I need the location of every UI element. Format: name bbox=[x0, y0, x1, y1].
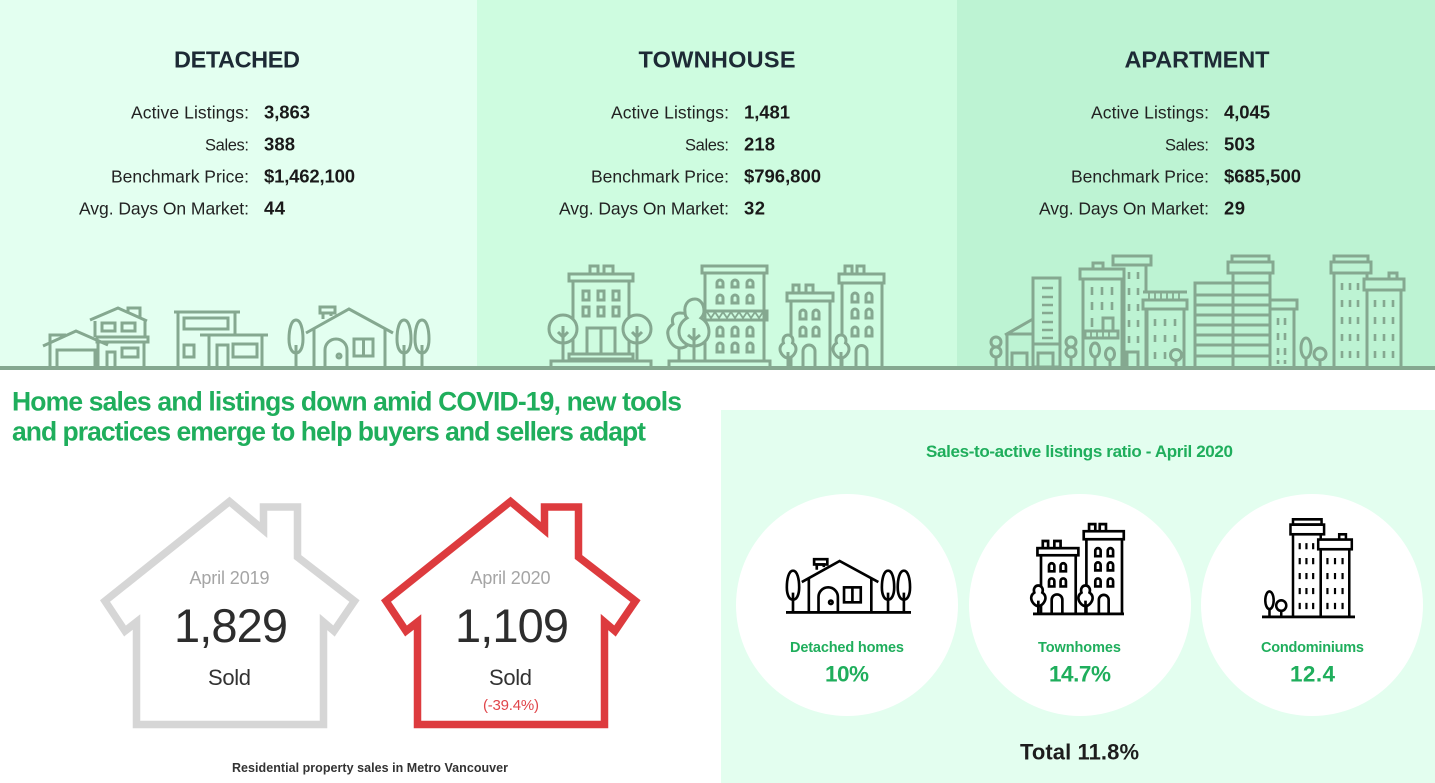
sold count: 1,109 bbox=[455, 599, 569, 652]
stats labels: detached bbox=[79, 102, 249, 218]
circle: detached homes bbox=[736, 494, 958, 716]
date label: April 2020 bbox=[470, 568, 550, 588]
sold count: 1,829 bbox=[174, 599, 288, 652]
icon: detached home bbox=[786, 559, 911, 614]
stats labels: apartment: Active Listings: bbox=[1091, 102, 1209, 122]
stats labels: apartment bbox=[1039, 102, 1209, 218]
icon: apartment skyline bbox=[991, 256, 1404, 367]
house outline: red bbox=[386, 502, 636, 724]
heading: apartment: APARTMENT bbox=[1124, 46, 1270, 72]
panel: apartment background bbox=[957, 0, 1435, 368]
stats labels: detached: Avg. Days On Market: bbox=[79, 198, 249, 218]
panel heading: Sales-to-active listings ratio - April 2020 bbox=[926, 442, 1233, 461]
label: Condominiums bbox=[1261, 640, 1364, 656]
sold label: Sold bbox=[489, 665, 532, 690]
stats labels: townhouse: Avg. Days On Market: bbox=[559, 198, 729, 218]
value: 10% bbox=[825, 662, 869, 686]
stats labels: townhouse: Benchmark Price: bbox=[591, 166, 729, 186]
stats values: detached: 44 bbox=[264, 198, 286, 218]
stats values: townhouse bbox=[744, 102, 821, 218]
house outline: grey bbox=[105, 502, 354, 724]
stats labels: apartment: Sales: bbox=[1165, 136, 1209, 154]
icon: condominiums bbox=[1262, 519, 1355, 618]
panel: April 2019 house bbox=[105, 502, 354, 724]
panel: apartment stats bbox=[1039, 46, 1301, 218]
stats labels: detached: Benchmark Price: bbox=[111, 166, 249, 186]
sold label: Sold bbox=[208, 665, 251, 690]
icon: townhomes bbox=[1031, 524, 1124, 615]
panel: detached background bbox=[0, 0, 477, 368]
date label: April 2019 bbox=[190, 568, 270, 588]
stats values: detached: 3,863 bbox=[264, 102, 310, 122]
stats labels: townhouse bbox=[559, 102, 729, 218]
stats labels: apartment: Benchmark Price: bbox=[1071, 166, 1209, 186]
stats values: townhouse: 32 bbox=[744, 198, 765, 218]
stats values: detached bbox=[264, 102, 355, 218]
stats values: apartment bbox=[1224, 102, 1301, 218]
ground line bbox=[0, 366, 1435, 370]
circle: townhomes bbox=[969, 494, 1191, 716]
stats values: townhouse: $796,800 bbox=[744, 166, 821, 186]
panel: sales-to-active listings ratio bbox=[721, 410, 1435, 783]
icon: townhouse skyline bbox=[549, 266, 884, 367]
stats values: apartment: 4,045 bbox=[1224, 102, 1270, 122]
stats values: townhouse: 218 bbox=[744, 134, 775, 154]
stats values: detached: $1,462,100 bbox=[264, 166, 355, 186]
icon: detached skyline bbox=[43, 307, 429, 367]
heading: townhouse: TOWNHOUSE bbox=[638, 46, 796, 72]
stats labels: townhouse: Sales: bbox=[685, 136, 729, 154]
percent change: (-39.4%) bbox=[483, 697, 539, 714]
stats values: apartment: 29 bbox=[1224, 198, 1245, 218]
stats values: detached: 388 bbox=[264, 134, 295, 154]
value: 12.4 bbox=[1290, 662, 1335, 686]
headline bbox=[12, 386, 682, 446]
stats values: apartment: 503 bbox=[1224, 134, 1255, 154]
panel: townhouse stats bbox=[559, 46, 821, 218]
panel background bbox=[721, 410, 1435, 783]
value: 14.7% bbox=[1049, 662, 1111, 686]
caption: Residential property sales in Metro Vancouver bbox=[232, 761, 508, 775]
stats labels: apartment: Avg. Days On Market: bbox=[1039, 198, 1209, 218]
stats labels: detached: Active Listings: bbox=[131, 102, 249, 122]
panel: townhouse background bbox=[477, 0, 957, 368]
stats labels: townhouse: Active Listings: bbox=[611, 102, 729, 122]
label: Detached homes bbox=[790, 640, 904, 656]
stats values: apartment: $685,500 bbox=[1224, 166, 1301, 186]
total: Total 11.8% bbox=[1020, 740, 1139, 764]
headline: and practices emerge to help buyers and sellers adapt bbox=[12, 416, 646, 446]
panel: April 2020 house bbox=[386, 502, 636, 724]
label: Townhomes bbox=[1038, 640, 1121, 656]
stats values: townhouse: 1,481 bbox=[744, 102, 790, 122]
stats labels: detached: Sales: bbox=[205, 136, 249, 154]
panel: detached stats bbox=[79, 46, 355, 218]
circle: condominiums bbox=[1201, 494, 1423, 716]
heading: detached: DETACHED bbox=[174, 46, 300, 72]
headline: Home sales and listings down amid COVID-19, new tools bbox=[12, 386, 682, 416]
